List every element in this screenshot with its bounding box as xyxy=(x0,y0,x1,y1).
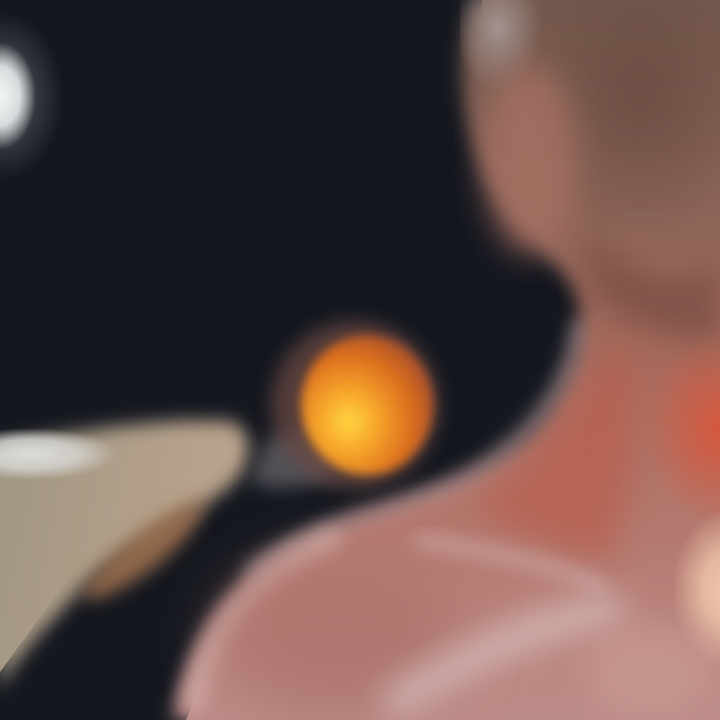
tone: red neck muscle xyxy=(470,340,631,560)
highlight: shoulder rim xyxy=(194,540,330,700)
highlight: collarbone streak xyxy=(420,540,600,585)
halo: muted orb ring xyxy=(271,321,439,489)
tone: pink cheek edge xyxy=(484,65,576,255)
tone: red area at right xyxy=(646,335,720,525)
backing: solid fill along the top, right and bottom frame edges xyxy=(186,0,720,720)
shape: cream cone xyxy=(0,420,249,690)
shade: jaw shadow xyxy=(585,230,720,340)
backing: solid cone fill reaching the left frame edge xyxy=(0,452,60,672)
highlight: pale neck edge xyxy=(250,325,578,570)
highlight: white rim xyxy=(0,428,118,480)
figure: head, neck and shoulder xyxy=(172,0,720,720)
highlight: pale hairline at top of head xyxy=(460,0,544,94)
handle: grey stem xyxy=(250,430,340,488)
shade: warm finger xyxy=(80,500,205,600)
tone: lower right chest xyxy=(584,622,716,718)
highlight: right chest glow xyxy=(672,510,720,670)
icon: glowing orange orb xyxy=(250,321,439,489)
shade: brown face area xyxy=(515,0,720,240)
object: cream hand and cup xyxy=(0,420,249,690)
highlight: lower chest streak xyxy=(398,610,610,700)
shape: body silhouette xyxy=(172,0,720,720)
core: orange orb xyxy=(301,335,433,475)
light: white glow at left xyxy=(0,10,66,182)
tone: shoulder mass xyxy=(220,562,460,718)
